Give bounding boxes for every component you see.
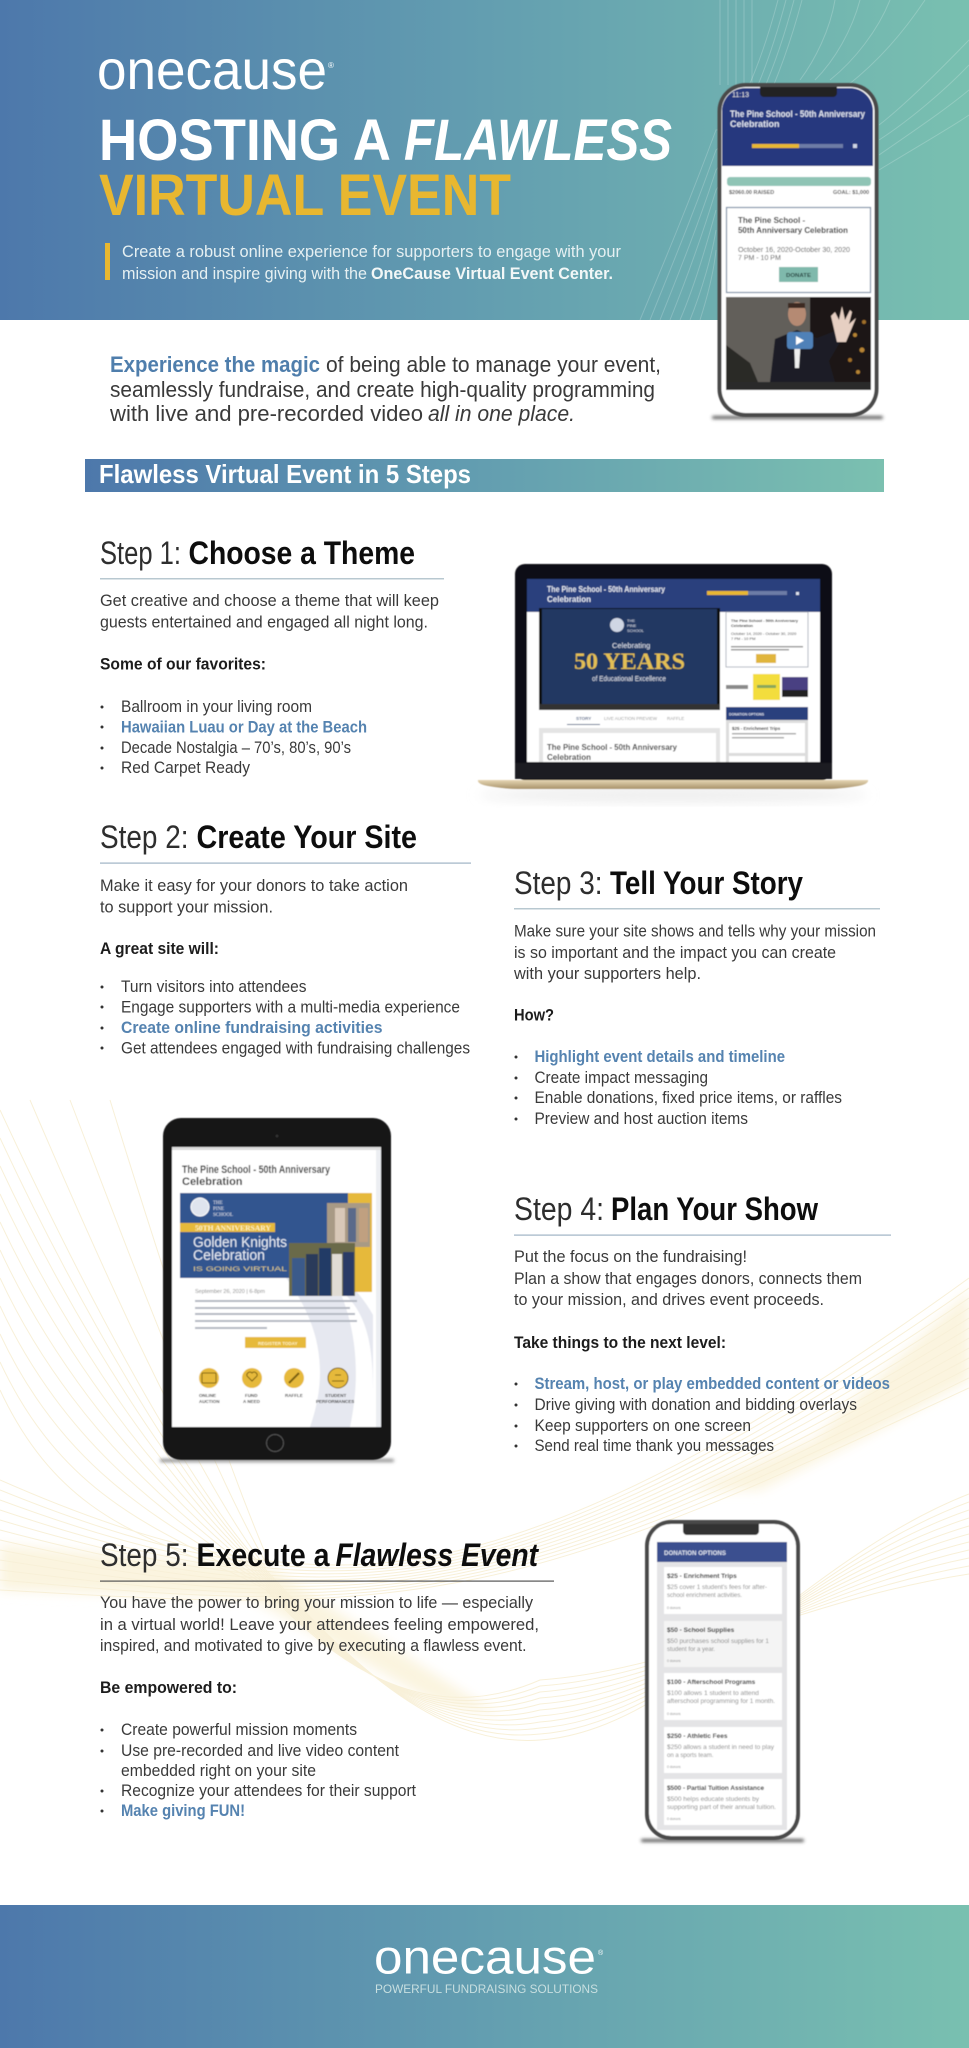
- step 4 list: [514, 1374, 890, 1455]
- step 1 list: Hawaiian Luau or Day at the Beach: [121, 718, 367, 736]
- step 1 heading: Choose a Theme: [188, 535, 415, 571]
- step 4 heading: Plan Your Show: [611, 1191, 818, 1227]
- laptop mockup: event site: LIVE AUCTION PREVIEW: [604, 716, 658, 721]
- donation card 3: $100 allows 1 student to attend: [667, 1691, 759, 1697]
- intro paragraph: of being able to manage your event,: [326, 352, 661, 377]
- step 5 heading: Step 5:: [100, 1537, 188, 1573]
- footer tagline: POWERFUL FUNDRAISING SOLUTIONS: [375, 1982, 598, 1996]
- step 4 heading: [514, 1191, 818, 1227]
- donation card 4: $250 allows a student in need to play: [667, 1745, 774, 1751]
- step 4 heading: Step 4:: [514, 1191, 604, 1227]
- icon: fund a need: [242, 1368, 262, 1388]
- video thumbnail: [726, 297, 871, 390]
- laptop mockup: event site: The Pine School - 50th Anniversary: [547, 743, 678, 752]
- donation card 2: $50 - School Supplies: [667, 1627, 735, 1634]
- donation card 5: 0 donors: [667, 1817, 681, 1821]
- panel: step 4: [514, 1191, 891, 1455]
- phone mockup: donation options: [641, 1520, 804, 1842]
- video slide: [539, 608, 720, 710]
- donation card 5: [664, 1779, 782, 1825]
- phone mockup: event page: Celebration: [730, 119, 780, 129]
- step 5 list: [100, 1720, 416, 1820]
- donation card 3: afterschool programming for 1 month.: [667, 1699, 775, 1705]
- step 4 list: Keep supporters on one screen: [534, 1416, 751, 1435]
- header intro text: [105, 242, 621, 283]
- donation card 1: 0 donors: [667, 1606, 681, 1610]
- donation card 5: $500 - Partial Tuition Assistance: [667, 1785, 764, 1792]
- laptop mockup: event site: Celebration: [547, 753, 591, 762]
- phone mockup: event page: $2060.00 RAISED: [729, 190, 774, 196]
- footer: [0, 1905, 969, 2048]
- step 3 description: Make sure your site shows and tells why your mission: [514, 922, 876, 940]
- section band: [85, 459, 884, 492]
- donation card 1: school enrichment activities.: [667, 1593, 742, 1599]
- step 5 list: Use pre-recorded and live video content: [121, 1741, 399, 1760]
- event banner: IS GOING VIRTUAL: [193, 1267, 288, 1273]
- step 2 list: Get attendees engaged with fundraising challenges: [121, 1038, 470, 1058]
- tablet mockup: event landing page: REGISTER TODAY: [258, 1341, 298, 1346]
- header intro text: mission and inspire giving with the: [122, 264, 367, 283]
- phone mockup: event page: 50th Anniversary Celebration: [738, 226, 848, 235]
- panel: step 5: [100, 1537, 554, 1820]
- phone mockup: event page: 7 PM - 10 PM: [738, 255, 781, 262]
- video slide: of Educational Excellence: [592, 676, 666, 683]
- laptop mockup: event site: STORY: [576, 716, 591, 721]
- sidebar: 7 PM - 10 PM: [731, 636, 755, 641]
- background: gold wave lines: [0, 1100, 969, 1740]
- logo: onecause: [97, 38, 327, 101]
- sidebar: Celebration: [731, 623, 754, 628]
- donation card 3: $100 - Afterschool Programs: [667, 1679, 756, 1686]
- panel: step 1: [100, 535, 444, 777]
- donation card 2: student for a year.: [667, 1647, 715, 1653]
- step 5 heading: [100, 1537, 539, 1573]
- video slide: PINE: [627, 623, 637, 628]
- icon: student performances: [328, 1368, 348, 1388]
- donation card 2: $50 purchases school supplies for 1: [667, 1639, 770, 1645]
- step 3 heading: Tell Your Story: [610, 865, 803, 901]
- step 1 list: Ballroom in your living room: [121, 697, 312, 716]
- donation card 1: $25 cover 1 student's fees for after-: [667, 1585, 767, 1591]
- section band: Flawless Virtual Event in 5 Steps: [99, 459, 471, 489]
- intro paragraph: seamlessly fundraise, and create high-quality programming: [110, 377, 655, 402]
- sidebar: [726, 612, 808, 762]
- step 3 list: Enable donations, fixed price items, or raffles: [534, 1088, 842, 1107]
- header intro text: Create a robust online experience for supporters to engage with your: [122, 242, 621, 261]
- step 1 list: [100, 697, 367, 777]
- donation card 1: [664, 1567, 782, 1614]
- step 4 description: [514, 1247, 862, 1309]
- step 3 description: is so important and the impact you can create: [514, 943, 836, 962]
- tablet mockup: event landing page: [160, 1118, 394, 1462]
- title: HOSTING A: [99, 108, 391, 173]
- step 3 list: Highlight event details and timeline: [534, 1047, 785, 1066]
- step 5 description: [100, 1593, 539, 1655]
- phone mockup: event page: DONATE: [786, 273, 811, 279]
- step 5 list: Make giving FUN!: [121, 1801, 245, 1820]
- step 2 list: [100, 977, 470, 1058]
- video slide: SCHOOL: [627, 628, 645, 633]
- sidebar: The Pine School - 50th Anniversary: [731, 618, 799, 623]
- decorative header lines: [640, 0, 969, 320]
- step 4 list: Stream, host, or play embedded content or videos: [534, 1374, 890, 1393]
- video slide: THE: [627, 618, 635, 623]
- donation card 3: [664, 1673, 782, 1720]
- step 3 description: with your supporters help.: [513, 964, 701, 983]
- step 5 list: embedded right on your site: [121, 1761, 316, 1780]
- intro paragraph: with live and pre-recorded video: [109, 401, 423, 426]
- tablet mockup: event landing page: September 26, 2020 | 6-8pm: [195, 1289, 265, 1295]
- laptop mockup: event site: Celebration: [547, 595, 591, 604]
- tablet mockup: event landing page: The Pine School - 50th Anniversary: [182, 1164, 331, 1176]
- step 3 subheading: How?: [514, 1006, 554, 1024]
- event banner: THE: [213, 1201, 223, 1206]
- step 1 list: Red Carpet Ready: [121, 758, 250, 777]
- step 1 subheading: Some of our favorites:: [100, 654, 266, 674]
- donation card 4: 0 donors: [667, 1765, 681, 1769]
- step 1 description: Get creative and choose a theme that will keep: [100, 591, 439, 610]
- donation card 5: $500 helps educate students by: [667, 1797, 759, 1803]
- panel: step 3: [513, 865, 880, 1128]
- step 5 heading: Flawless Event: [336, 1537, 539, 1573]
- panel: step 2: [100, 819, 471, 1058]
- step 2 heading: Create Your Site: [196, 819, 417, 855]
- icon: online auction: [199, 1368, 219, 1388]
- footer logo: ®: [598, 1949, 604, 1957]
- phone mockup: donation options: DONATION OPTIONS: [664, 1550, 727, 1557]
- intro paragraph: all in one place.: [428, 401, 575, 426]
- step 4 description: to your mission, and drives event proceeds.: [514, 1290, 824, 1309]
- donation card 4: $250 - Athletic Fees: [667, 1733, 728, 1740]
- step 3 heading: [514, 865, 803, 901]
- step 3 heading: Step 3:: [514, 865, 602, 901]
- step 2 heading: [100, 819, 417, 855]
- step 5 description: in a virtual world! Leave your attendees feeling empowered,: [100, 1615, 539, 1634]
- phone mockup: event page: GOAL: $1,000: [833, 190, 869, 196]
- tablet mockup: event landing page: Celebration: [182, 1176, 243, 1188]
- footer logo: onecause: [374, 1932, 596, 1984]
- donation card 1: $25 - Enrichment Trips: [667, 1573, 737, 1580]
- step 4 list: Drive giving with donation and bidding overlays: [534, 1395, 857, 1414]
- step 4 description: Put the focus on the fundraising!: [514, 1247, 747, 1266]
- step 5 list: Create powerful mission moments: [121, 1720, 357, 1739]
- event banner: Celebration: [193, 1247, 265, 1264]
- step 1 list: Decade Nostalgia – 70’s, 80’s, 90’s: [121, 738, 351, 757]
- laptop mockup: event site: RAFFLE: [667, 716, 684, 721]
- donation card 2: 0 donors: [667, 1659, 681, 1663]
- header intro text: OneCause Virtual Event Center.: [371, 264, 613, 283]
- logo: ®: [328, 61, 334, 70]
- tablet mockup: event landing page: STUDENT: [325, 1393, 347, 1398]
- step 2 description: Make it easy for your donors to take action: [100, 876, 408, 895]
- step 5 subheading: Be empowered to:: [100, 1678, 237, 1697]
- phone mockup: event page: 11:13: [732, 92, 749, 99]
- donation card 4: on a sports team.: [667, 1753, 714, 1759]
- title: VIRTUAL EVENT: [99, 163, 511, 228]
- laptop mockup: event site: [478, 564, 868, 802]
- event banner: SCHOOL: [213, 1213, 233, 1218]
- step 1 description: [100, 591, 439, 632]
- phone mockup: event page: [712, 83, 883, 419]
- donation card 5: supporting part of their annual tuition.: [667, 1805, 776, 1811]
- step 5 description: You have the power to bring your mission to life — especially: [100, 1593, 533, 1612]
- step 1 heading: [100, 535, 415, 571]
- step 3 list: Create impact messaging: [534, 1068, 708, 1087]
- step 2 list: Turn visitors into attendees: [121, 977, 306, 996]
- tablet mockup: event landing page: PERFORMANCES: [316, 1399, 354, 1404]
- event banner: [180, 1193, 372, 1296]
- step 5 heading: Execute a: [196, 1537, 330, 1573]
- step 2 description: to support your mission.: [100, 898, 273, 916]
- step 2 description: [100, 876, 408, 916]
- step 3 description: [513, 922, 876, 983]
- sidebar: October 14, 2020 - October 30, 2020: [731, 631, 797, 636]
- video slide: 50 YEARS: [574, 649, 685, 674]
- event banner: 50TH ANNIVERSARY: [195, 1224, 272, 1232]
- tablet mockup: event landing page: A NEED: [243, 1399, 261, 1404]
- tablet mockup: event landing page: AUCTION: [199, 1399, 220, 1404]
- phone mockup: event page: The Pine School - 50th Anniversary: [730, 109, 865, 119]
- step 2 list: Create online fundraising activities: [121, 1018, 382, 1037]
- step 1 description: guests entertained and engaged all night long.: [100, 612, 428, 632]
- step 2 subheading: A great site will:: [100, 939, 219, 958]
- header banner: [0, 0, 969, 320]
- tablet mockup: event landing page: FUND: [245, 1393, 258, 1398]
- event banner: Golden Knights: [193, 1234, 287, 1251]
- step 1 heading: Step 1:: [100, 535, 181, 571]
- donation card 4: [664, 1727, 782, 1773]
- laptop mockup: event site: The Pine School - 50th Anniversary: [547, 585, 665, 594]
- video slide: Celebrating: [612, 641, 650, 650]
- step 2 heading: Step 2:: [100, 819, 188, 855]
- title: FLAWLESS: [404, 108, 672, 173]
- phone mockup: event page: October 16, 2020-October 30, 2020: [738, 247, 850, 254]
- tablet mockup: event landing page: RAFFLE: [285, 1393, 303, 1398]
- intro paragraph: [109, 352, 661, 426]
- donation card 2: [664, 1621, 782, 1667]
- step 5 description: inspired, and motivated to give by executing a flawless event.: [100, 1636, 526, 1655]
- step 3 list: [514, 1047, 842, 1128]
- step 4 subheading: Take things to the next level:: [514, 1333, 726, 1352]
- step 5 list: Recognize your attendees for their support: [121, 1781, 416, 1800]
- tablet mockup: event landing page: ONLINE: [199, 1393, 216, 1398]
- event banner: PINE: [213, 1207, 224, 1212]
- icon: raffle: [284, 1368, 304, 1388]
- sidebar: DONATION OPTIONS: [729, 712, 765, 716]
- sidebar: $25 - Enrichment Trips: [732, 726, 781, 731]
- phone mockup: event page: The Pine School -: [738, 216, 805, 225]
- intro paragraph: Experience the magic: [110, 352, 320, 377]
- step 4 list: Send real time thank you messages: [534, 1436, 774, 1455]
- step 3 list: Preview and host auction items: [534, 1109, 748, 1128]
- donation card 3: 0 donors: [667, 1712, 681, 1716]
- title: [99, 108, 672, 228]
- step 2 list: Engage supporters with a multi-media experience: [121, 998, 460, 1016]
- step 4 description: Plan a show that engages donors, connects them: [514, 1269, 862, 1288]
